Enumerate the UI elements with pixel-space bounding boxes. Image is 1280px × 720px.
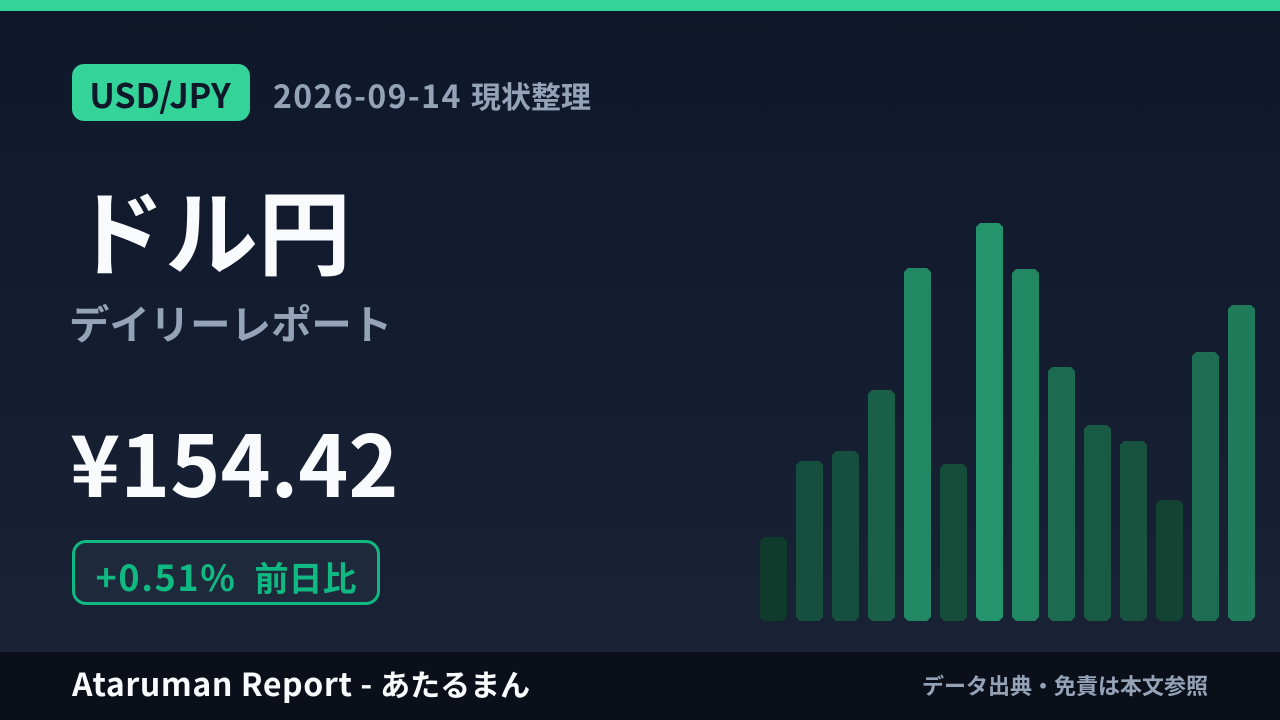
- change badge: [72, 540, 380, 605]
- footer disclaimer: データ出典・免責は本文参照: [922, 669, 1208, 701]
- footer brand: Ataruman Report - あたるまん: [72, 660, 530, 706]
- badge: USD/JPY: [72, 64, 250, 121]
- title: ドル円: [72, 160, 351, 295]
- change badge: +0.51% 前日比: [96, 550, 356, 602]
- bar 14: [1228, 305, 1255, 621]
- bar 7: [976, 223, 1003, 621]
- bar 12: [1156, 500, 1183, 621]
- bar 3: [832, 451, 859, 621]
- bar 13: [1192, 352, 1219, 621]
- bar 6: [940, 464, 967, 621]
- top accent bar: [0, 0, 1280, 11]
- footer band: [0, 652, 1280, 720]
- bar 2: [796, 461, 823, 621]
- bar 9: [1048, 367, 1075, 621]
- bar 1: [760, 537, 787, 621]
- bar 5: [904, 268, 931, 621]
- bar 10: [1084, 425, 1111, 621]
- bar 8: [1012, 269, 1039, 621]
- bar 11: [1120, 441, 1147, 621]
- bar 4: [868, 390, 895, 621]
- date text: 2026-09-14 現状整理: [273, 72, 591, 118]
- bar chart: [760, 223, 1255, 621]
- price: ¥154.42: [70, 399, 399, 522]
- subtitle: デイリーレポート: [69, 292, 392, 351]
- badge: USD/JPY: USD/JPY: [89, 69, 231, 118]
